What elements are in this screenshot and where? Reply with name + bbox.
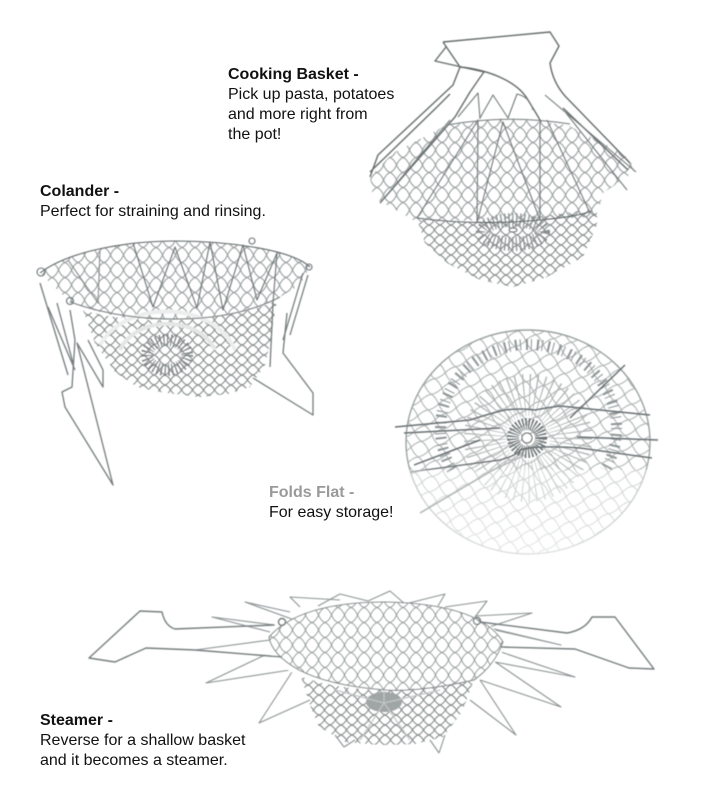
cooking basket handle — [370, 32, 630, 203]
cooking basket wire frame — [380, 93, 636, 223]
label: steamer: Steamer - — [40, 712, 113, 729]
label: folds flat — [269, 484, 394, 521]
label: steamer — [40, 712, 246, 769]
lower half fade — [395, 450, 665, 562]
steamer photo — [89, 591, 654, 753]
flat folded basket photo — [395, 325, 665, 562]
label: colander: Colander - — [40, 183, 119, 200]
label: cooking basket: Pick up pasta, potatoes — [228, 86, 394, 103]
label: cooking basket: Cooking Basket - — [228, 66, 359, 83]
flat basket pale wire — [420, 455, 525, 513]
steamer base hub — [335, 690, 440, 740]
label: folds flat: For easy storage! — [269, 504, 394, 521]
flat basket rim — [406, 330, 650, 554]
cooking basket mesh — [370, 118, 637, 287]
label: colander: Perfect for straining and rinsing. — [40, 203, 266, 220]
steamer bowl mesh — [269, 602, 503, 690]
label: steamer: Reverse for a shallow basket — [40, 732, 245, 749]
label: colander — [40, 183, 266, 220]
steamer handles — [89, 611, 654, 669]
cooking basket photo — [370, 32, 637, 287]
flat basket mesh — [406, 330, 650, 554]
label: steamer: and it becomes a steamer. — [40, 752, 228, 769]
label: cooking basket: the pot! — [228, 126, 281, 143]
label: cooking basket — [228, 66, 394, 143]
label: cooking basket: and more right from — [228, 106, 368, 123]
colander wire frame — [37, 238, 312, 319]
steamer lower basket — [299, 670, 474, 745]
colander legs — [40, 273, 313, 485]
colander mesh — [40, 241, 310, 397]
colander photo — [37, 238, 313, 485]
label: folds flat: Folds Flat - — [269, 484, 354, 501]
flat basket handles — [395, 365, 658, 472]
steamer star wires — [195, 591, 575, 753]
flat basket centre hole — [522, 433, 532, 443]
